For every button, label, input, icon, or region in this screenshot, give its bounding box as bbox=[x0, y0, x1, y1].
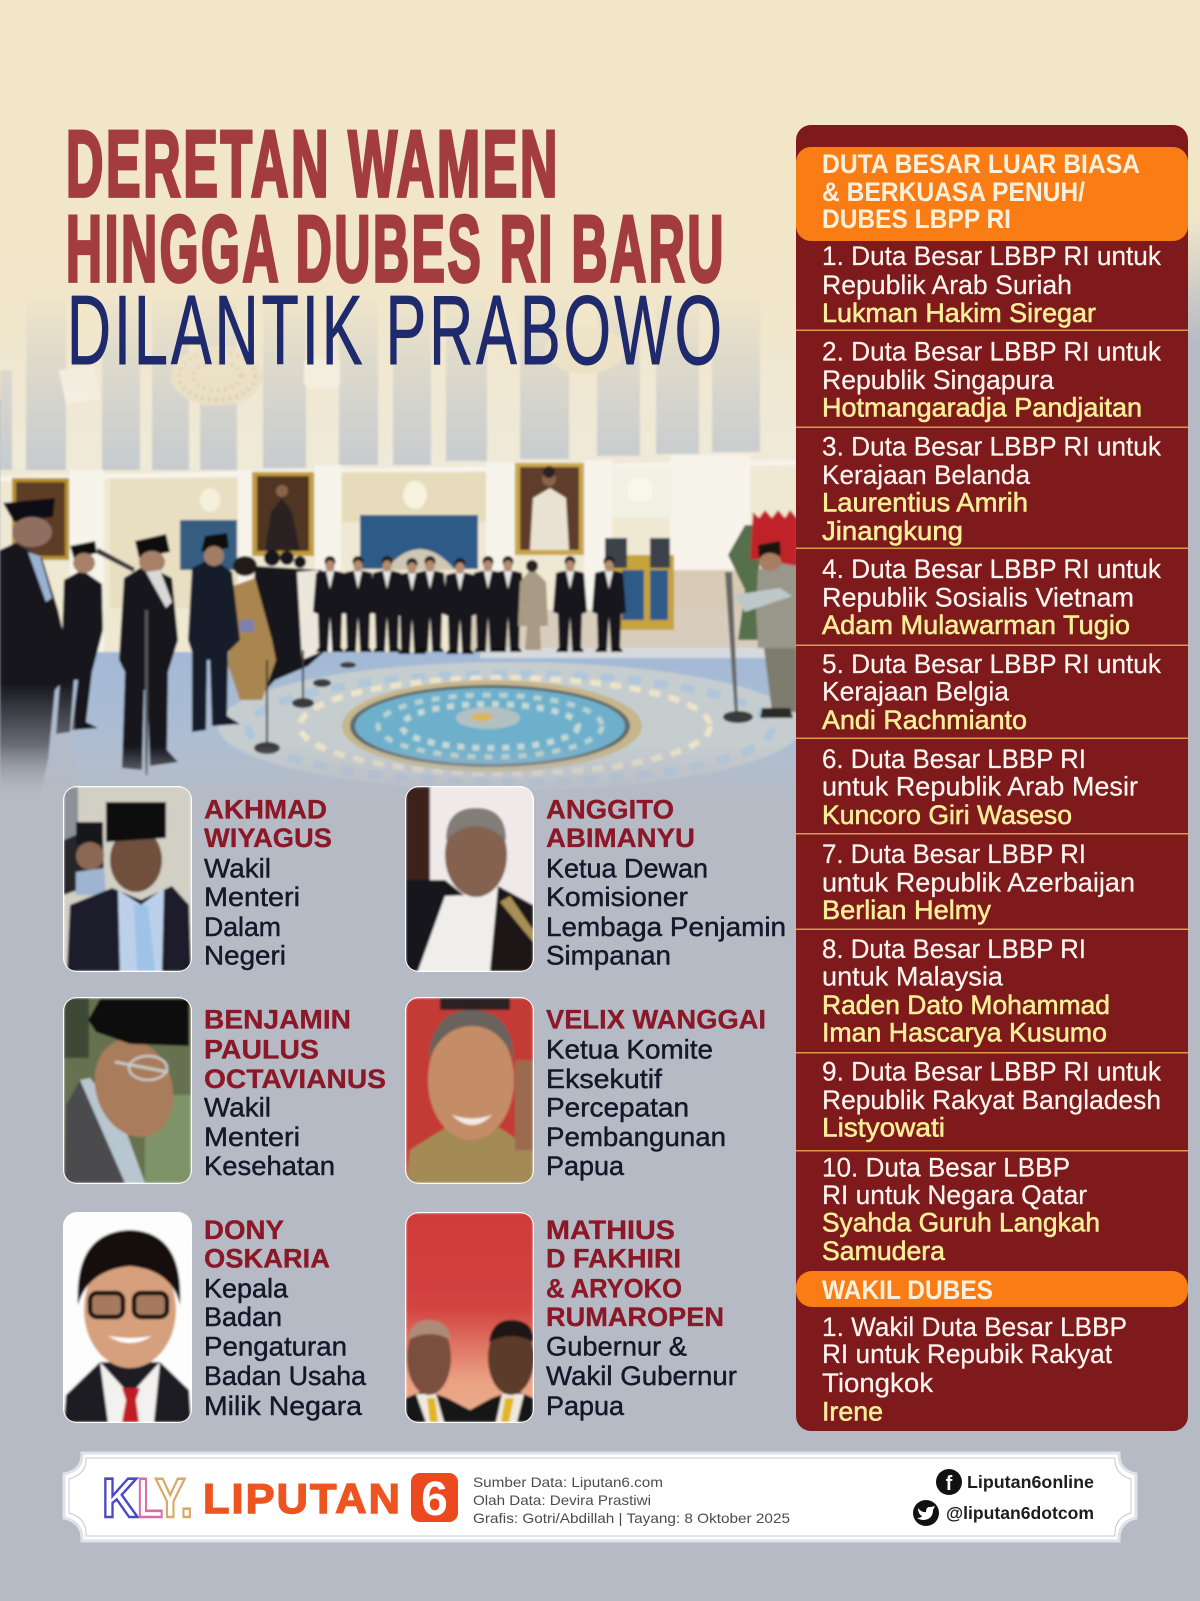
heading: Wakil Dubes bbox=[796, 1271, 1188, 1307]
item 10: Syahda Guruh Langkah bbox=[822, 1208, 1100, 1238]
paintings bbox=[12, 478, 69, 560]
card: Anggito Abimanyu bbox=[405, 786, 786, 972]
credits: Grafis: Gotri/Abdillah | Tayang: 8 Oktober 2025 bbox=[473, 1510, 790, 1526]
item 3: 3. Duta Besar LBBP RI untuk bbox=[822, 432, 1162, 462]
portrait bbox=[405, 786, 534, 972]
role: Eksekutif bbox=[546, 1064, 663, 1094]
item 1: Republik Arab Suriah bbox=[822, 270, 1072, 300]
icon: facebook: f bbox=[946, 1473, 953, 1495]
role: Wakil Gubernur bbox=[546, 1361, 737, 1391]
item 1: Lukman Hakim Siregar bbox=[822, 298, 1096, 328]
name bbox=[546, 794, 695, 853]
title bbox=[66, 111, 726, 385]
role bbox=[546, 854, 786, 970]
item 5: Andi Rachmianto bbox=[822, 705, 1027, 735]
item 9: Listyowati bbox=[822, 1112, 945, 1142]
name: DONY bbox=[204, 1215, 284, 1245]
logo: 6 badge bbox=[411, 1473, 458, 1526]
item 10: RI untuk Negara Qatar bbox=[822, 1180, 1087, 1210]
role: Badan bbox=[204, 1302, 282, 1332]
credits bbox=[473, 1474, 790, 1526]
card: Akhmad Wiyagus bbox=[63, 786, 332, 972]
name: ANGGITO bbox=[546, 794, 674, 824]
name bbox=[204, 794, 332, 853]
item 9 bbox=[822, 1056, 1162, 1142]
item 7 bbox=[822, 839, 1135, 925]
item 10: 10. Duta Besar LBBP bbox=[822, 1152, 1070, 1182]
twitter handle: @liputan6dotcom bbox=[946, 1503, 1094, 1523]
portrait bbox=[63, 1212, 192, 1423]
item 5: Kerajaan Belgia bbox=[822, 676, 1009, 706]
logo: KLY: L bbox=[137, 1466, 163, 1529]
item 3 bbox=[822, 432, 1162, 546]
man B bbox=[56, 570, 103, 734]
role bbox=[204, 854, 300, 970]
role: Simpanan bbox=[546, 940, 671, 970]
logo: KLY bbox=[102, 1466, 193, 1529]
man A bbox=[0, 543, 72, 798]
footer banner bbox=[64, 1453, 1136, 1541]
role: Milik Negara bbox=[204, 1391, 363, 1421]
man C bbox=[119, 565, 178, 770]
card: Dony Oskaria bbox=[63, 1212, 367, 1423]
item 7: untuk Republik Azerbaijan bbox=[822, 868, 1135, 898]
panel: ambassadors list bbox=[796, 125, 1188, 1431]
item 7: Berlian Helmy bbox=[822, 895, 992, 925]
item 8: Iman Hascarya Kusumo bbox=[822, 1018, 1107, 1048]
portrait bbox=[63, 786, 192, 972]
right marble and gold bench bbox=[610, 570, 750, 655]
item 2: Republik Singapura bbox=[822, 365, 1054, 395]
portrait bbox=[405, 1212, 534, 1423]
role: Dalam bbox=[204, 912, 281, 942]
role bbox=[204, 1092, 335, 1181]
carpet ornament bbox=[218, 662, 802, 790]
deputy item: 1. Wakil Duta Besar LBBP bbox=[822, 1312, 1127, 1342]
fades bbox=[0, 250, 797, 470]
item 1: 1. Duta Besar LBBP RI untuk bbox=[822, 241, 1162, 271]
name bbox=[204, 1004, 386, 1094]
role: Badan Usaha bbox=[204, 1361, 367, 1391]
card: Velix Wanggai bbox=[405, 997, 766, 1184]
carpet bbox=[0, 652, 797, 802]
name: VELIX WANGGAI bbox=[546, 1004, 766, 1034]
item 6: 6. Duta Besar LBBP RI bbox=[822, 744, 1086, 774]
logo: KLY: K bbox=[102, 1466, 138, 1529]
name: ABIMANYU bbox=[546, 823, 695, 853]
item 8: Raden Dato Mohammad bbox=[822, 990, 1110, 1020]
item 2: Hotmangaradja Pandjaitan bbox=[822, 392, 1142, 422]
icon: twitter bbox=[913, 1500, 939, 1526]
role: Pembangunan bbox=[546, 1122, 726, 1152]
wall bbox=[0, 250, 797, 660]
chandeliers bbox=[171, 346, 263, 406]
name: & ARYOKO bbox=[546, 1274, 682, 1304]
name: BENJAMIN bbox=[204, 1004, 351, 1034]
heading: Duta Besar: & BERKUASA PENUH/ bbox=[822, 177, 1086, 207]
item 3: Jinangkung bbox=[822, 516, 963, 546]
foreground men bbox=[252, 566, 326, 694]
plant and flags bbox=[728, 525, 760, 640]
name bbox=[204, 1215, 330, 1274]
item 4: 4. Duta Besar LBBP RI untuk bbox=[822, 554, 1162, 584]
item 3: Kerajaan Belanda bbox=[822, 460, 1030, 490]
photo: inauguration ceremony hall bbox=[0, 250, 802, 802]
role: Papua bbox=[546, 1391, 625, 1421]
role: Kepala bbox=[204, 1274, 289, 1304]
name: WIYAGUS bbox=[204, 823, 332, 853]
item 4 bbox=[822, 554, 1162, 640]
item 9: 9. Duta Besar LBBP RI untuk bbox=[822, 1056, 1162, 1086]
wall panels bbox=[0, 300, 760, 475]
logo: Liputan: LIPUTAN bbox=[203, 1475, 402, 1522]
name: MATHIUS bbox=[546, 1215, 675, 1245]
name: PAULUS bbox=[204, 1034, 319, 1064]
credits: Olah Data: Devira Prastiwi bbox=[473, 1492, 651, 1508]
item 7: 7. Duta Besar LBBP RI bbox=[822, 839, 1086, 869]
name bbox=[546, 1215, 724, 1332]
item 5 bbox=[822, 649, 1162, 735]
facebook handle: Liputan6online bbox=[967, 1472, 1094, 1492]
item 2 bbox=[822, 336, 1162, 422]
name: D FAKHIRI bbox=[546, 1244, 681, 1274]
role: Gubernur & bbox=[546, 1332, 687, 1362]
item 2: 2. Duta Besar LBBP RI untuk bbox=[822, 336, 1162, 366]
title line 3: DILANTIK PRABOWO bbox=[67, 275, 725, 385]
heading: Duta Besar: DUTA BESAR LUAR BIASA bbox=[822, 149, 1140, 179]
president reading bbox=[756, 562, 797, 648]
deputy item: RI untuk Repubik Rakyat bbox=[822, 1339, 1113, 1369]
lower room bbox=[0, 470, 797, 660]
deputy item: Tiongkok bbox=[822, 1368, 934, 1398]
role bbox=[546, 1034, 726, 1181]
deputy item: Irene bbox=[822, 1396, 883, 1426]
item 4: Adam Mulawarman Tugio bbox=[822, 610, 1130, 640]
item 1 bbox=[822, 241, 1162, 328]
speakers bbox=[59, 366, 101, 404]
item 10: Samudera bbox=[822, 1236, 945, 1266]
item 4: Republik Sosialis Vietnam bbox=[822, 582, 1134, 612]
icon: facebook bbox=[936, 1469, 962, 1495]
standing row bbox=[313, 556, 347, 652]
item 8: 8. Duta Besar LBBP RI bbox=[822, 934, 1086, 964]
role: Kesehatan bbox=[204, 1151, 335, 1181]
item 6 bbox=[822, 744, 1138, 830]
card: Mathius D Fakhiri and Aryoko Rumaropen bbox=[405, 1212, 737, 1423]
blue curtains bbox=[180, 520, 237, 570]
item 5: 5. Duta Besar LBBP RI untuk bbox=[822, 649, 1162, 679]
item 10 bbox=[822, 1152, 1100, 1266]
role: Papua bbox=[546, 1151, 625, 1181]
role bbox=[546, 1332, 737, 1421]
role: Ketua Komite bbox=[546, 1034, 713, 1064]
heading: Duta Besar bbox=[796, 147, 1188, 241]
role: Ketua Dewan bbox=[546, 854, 708, 884]
name: OCTAVIANUS bbox=[204, 1064, 386, 1094]
role: Menteri bbox=[204, 882, 300, 912]
role: Komisioner bbox=[546, 882, 688, 912]
item 9: Republik Rakyat Bangladesh bbox=[822, 1085, 1161, 1115]
heading: Duta Besar: DUBES LBPP RI bbox=[822, 204, 1011, 234]
role: Wakil bbox=[204, 1092, 271, 1122]
role: Pengaturan bbox=[204, 1332, 347, 1362]
name: AKHMAD bbox=[204, 794, 327, 824]
role: Wakil bbox=[204, 854, 271, 884]
name: OSKARIA bbox=[204, 1244, 330, 1274]
item 8 bbox=[822, 934, 1110, 1048]
role: Percepatan bbox=[546, 1092, 689, 1122]
portrait bbox=[63, 997, 192, 1184]
logo: 6 badge: 6 bbox=[421, 1473, 448, 1526]
item 8: untuk Malaysia bbox=[822, 962, 1003, 992]
role bbox=[204, 1274, 367, 1421]
role: Menteri bbox=[204, 1122, 300, 1152]
credits: Sumber Data: Liputan6.com bbox=[473, 1474, 663, 1490]
title line 1: DERETAN WAMEN bbox=[66, 111, 560, 216]
portrait bbox=[405, 997, 534, 1184]
name: RUMAROPEN bbox=[546, 1302, 724, 1332]
deputy item bbox=[822, 1312, 1127, 1426]
logo: KLY: Y. bbox=[155, 1466, 193, 1529]
item 6: Kuncoro Giri Waseso bbox=[822, 800, 1072, 830]
card: Benjamin Paulus Octavianus bbox=[63, 997, 386, 1184]
microphone stands bbox=[96, 548, 753, 775]
role: Lembaga Penjamin bbox=[546, 912, 786, 942]
heading: Wakil Dubes: WAKIL DUBES bbox=[822, 1275, 993, 1305]
item 6: untuk Republik Arab Mesir bbox=[822, 772, 1138, 802]
item 3: Laurentius Amrih bbox=[822, 488, 1028, 518]
man D bbox=[188, 558, 240, 732]
role: Negeri bbox=[204, 940, 286, 970]
